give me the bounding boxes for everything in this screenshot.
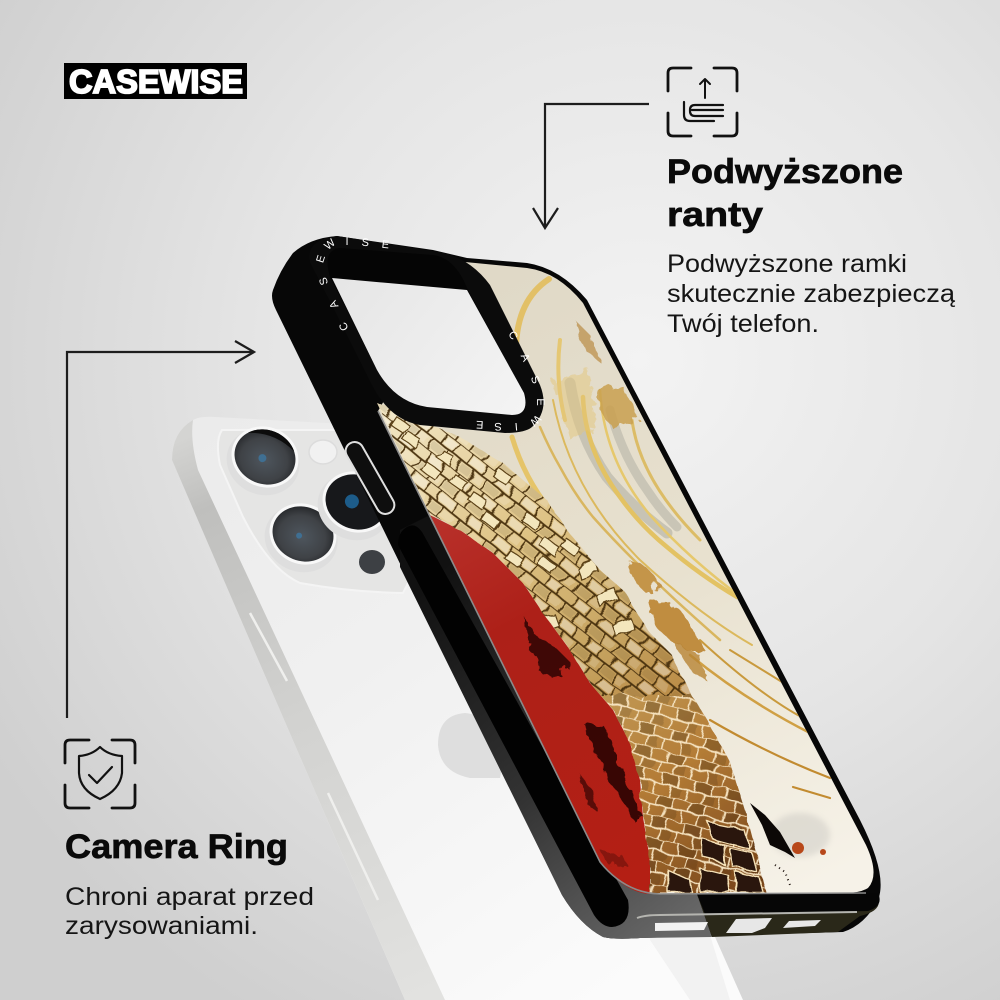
ring lettering: E	[534, 398, 546, 406]
cream base	[378, 262, 874, 894]
dark bricks	[668, 823, 764, 893]
icon: shield	[65, 740, 135, 808]
ring lettering: E	[476, 418, 484, 430]
ring lettering	[314, 236, 546, 432]
ring lettering: I	[514, 420, 518, 432]
ring lettering: S	[494, 420, 502, 432]
lidar	[359, 550, 385, 574]
side buttons	[250, 613, 378, 900]
heading: Camera Ring: Camera Ring	[65, 828, 288, 866]
ring lettering: S	[317, 276, 331, 287]
flash	[309, 440, 337, 464]
case body	[272, 236, 881, 939]
lens: top	[216, 415, 311, 506]
heading: Podwyższone ranty: Podwyższone	[667, 153, 903, 191]
gold brick band	[370, 400, 780, 900]
ring lettering: W	[527, 412, 543, 428]
heading: Podwyższone ranty	[667, 153, 903, 234]
phone: white iPhone behind the case	[172, 415, 743, 1000]
ring lettering: S	[528, 374, 542, 386]
black splatter	[750, 803, 830, 885]
ring lettering: C	[337, 320, 351, 333]
ring lettering: C	[505, 329, 520, 342]
icon: raised edges	[668, 68, 737, 136]
bottom edge highlight	[637, 912, 857, 918]
ring lettering: E	[381, 239, 390, 251]
side button	[342, 439, 398, 517]
phone side band	[172, 420, 445, 1000]
lens: lower	[254, 492, 349, 583]
ring lettering: A	[327, 298, 341, 310]
camera ring	[309, 236, 546, 433]
ring lettering: I	[345, 236, 349, 248]
gold swirl strokes	[512, 279, 830, 798]
heading: Podwyższone ranty: ranty	[667, 196, 763, 234]
logo: CASEWISE: CASEWISE	[69, 63, 243, 100]
side slot	[398, 525, 629, 927]
text: camera ring description	[65, 883, 314, 940]
lens: right	[307, 460, 402, 551]
camera plateau	[218, 430, 420, 593]
text: raised edges description: Podwyższone ramki	[667, 250, 907, 278]
text: camera ring description: Chroni aparat przed	[65, 883, 314, 911]
ring lettering: A	[518, 352, 532, 364]
red paint field	[430, 515, 650, 894]
port: mic	[783, 920, 821, 928]
ring lettering: E	[314, 254, 328, 264]
artwork	[370, 262, 874, 900]
soft lower shading	[640, 800, 730, 1000]
bright bricks	[391, 416, 634, 636]
glossy lower rim	[400, 515, 712, 939]
text: raised edges description: Twój telefon.	[667, 310, 819, 338]
text: raised edges description	[667, 250, 955, 338]
ring lettering: W	[322, 236, 338, 253]
phone case	[272, 236, 881, 939]
bottom bar	[697, 894, 879, 937]
port: usb-c	[726, 918, 772, 933]
apple logo	[438, 713, 505, 778]
text: camera ring description: zarysowaniami.	[65, 912, 258, 940]
red edge highlight	[378, 411, 866, 894]
arrow: to raised edges	[533, 104, 649, 228]
ring lettering: S	[361, 237, 369, 249]
gold splashes	[552, 320, 707, 680]
port: speaker	[655, 922, 708, 931]
ring opening	[332, 278, 526, 415]
arrow: to camera ring	[67, 341, 254, 718]
black smudges on red	[525, 617, 642, 868]
text: raised edges description: skutecznie zabezpieczą	[667, 280, 955, 308]
ring opening dark wedge	[328, 248, 526, 415]
